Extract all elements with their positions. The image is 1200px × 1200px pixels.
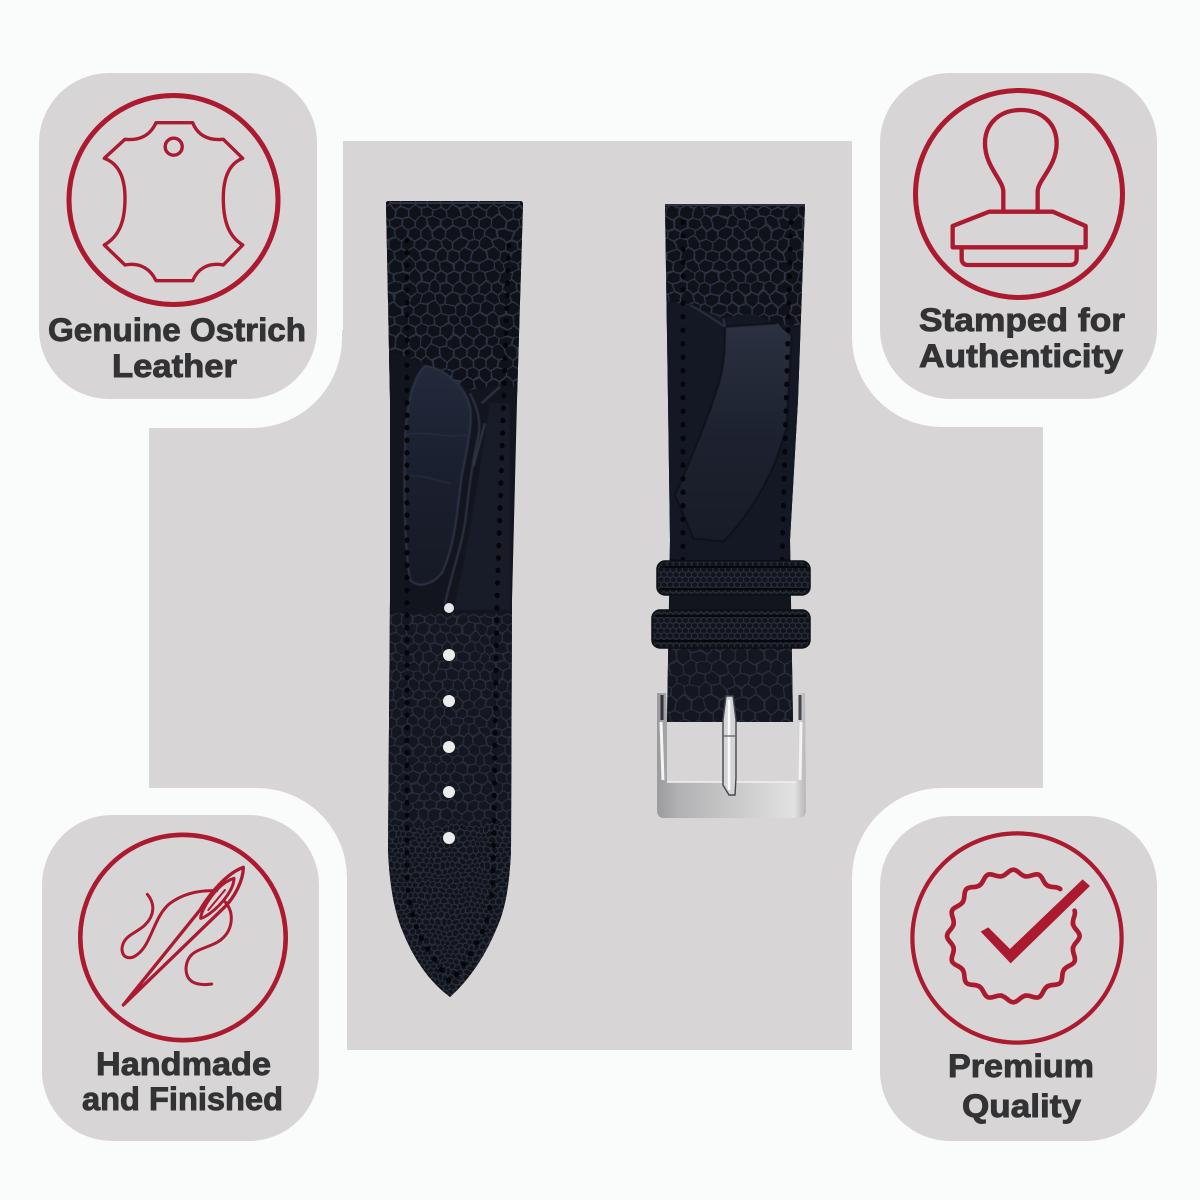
heading: Genuine Ostrich Leather: Genuine Ostrich (48, 312, 306, 348)
card: Premium Quality (880, 816, 1157, 1141)
icon: leather hide in ring (69, 96, 278, 304)
heading: Stamped for Authenticity: Authenticity (919, 338, 1123, 374)
watch strap: long piece with holes (386, 201, 523, 997)
heading: Premium Quality: Quality (962, 1088, 1081, 1124)
icon: rubber stamp in ring (916, 90, 1122, 298)
strap keeper: lower loop (652, 610, 810, 648)
watch strap: buckle piece (652, 196, 815, 818)
card: Handmade and Finished (42, 815, 319, 1141)
heading: Genuine Ostrich Leather: Leather (112, 348, 237, 384)
background panel: cross-shaped backdrop (149, 141, 1043, 1050)
card: Genuine Ostrich Leather (39, 73, 317, 399)
heading: Handmade and Finished: Handmade (96, 1046, 271, 1082)
heading: Premium Quality: Premium (948, 1048, 1094, 1084)
card: Stamped for Authenticity (880, 73, 1157, 399)
icon: rosette with check mark in ring (912, 833, 1122, 1043)
buckle: tongue (723, 696, 736, 795)
strap keeper: upper loop (657, 561, 810, 595)
icon: needle and thread in ring (80, 835, 286, 1040)
buckle: steel frame (657, 693, 806, 818)
heading: Handmade and Finished: and Finished (82, 1081, 283, 1117)
heading: Stamped for Authenticity: Stamped for (919, 302, 1125, 338)
